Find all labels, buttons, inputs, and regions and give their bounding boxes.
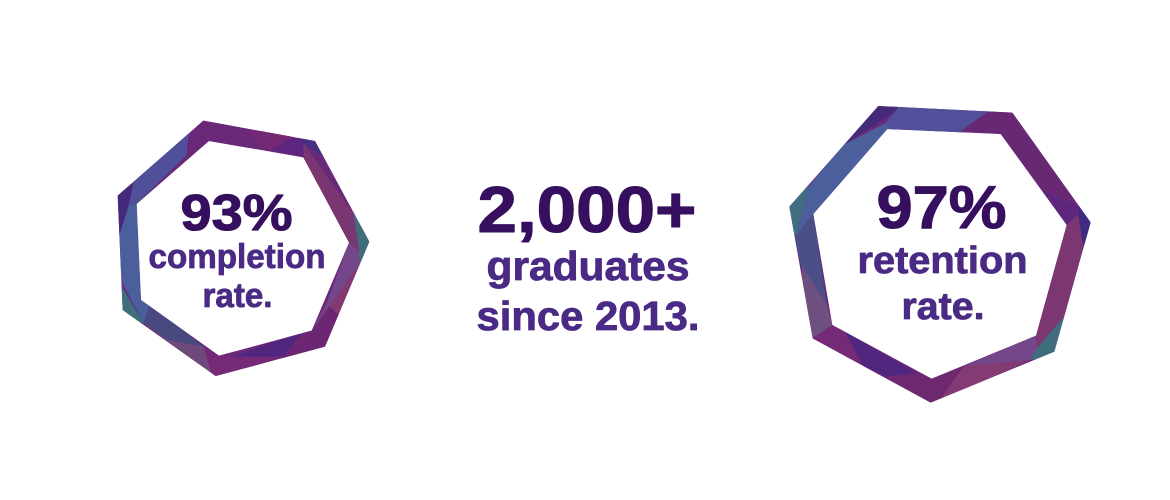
panel: completion rate ring [118,120,370,376]
text: 97% retention rate: 97% [876,174,1006,241]
text: 2,000+ graduates since 2013: graduates [486,243,690,289]
text: 2,000+ graduates since 2013 [476,173,700,339]
text: 2,000+ graduates since 2013: since 2013. [476,293,700,339]
text: 93% completion rate: completion [148,238,326,276]
text: 97% retention rate: rate. [902,286,984,328]
text: 93% completion rate [148,184,326,315]
text: 2,000+ graduates since 2013: 2,000+ [478,173,696,246]
text: 93% completion rate: rate. [202,277,272,315]
panel: retention rate ring [783,100,1097,407]
text: 97% retention rate: retention [858,240,1028,282]
text: 93% completion rate: 93% [180,184,292,241]
text: 97% retention rate [858,174,1028,328]
